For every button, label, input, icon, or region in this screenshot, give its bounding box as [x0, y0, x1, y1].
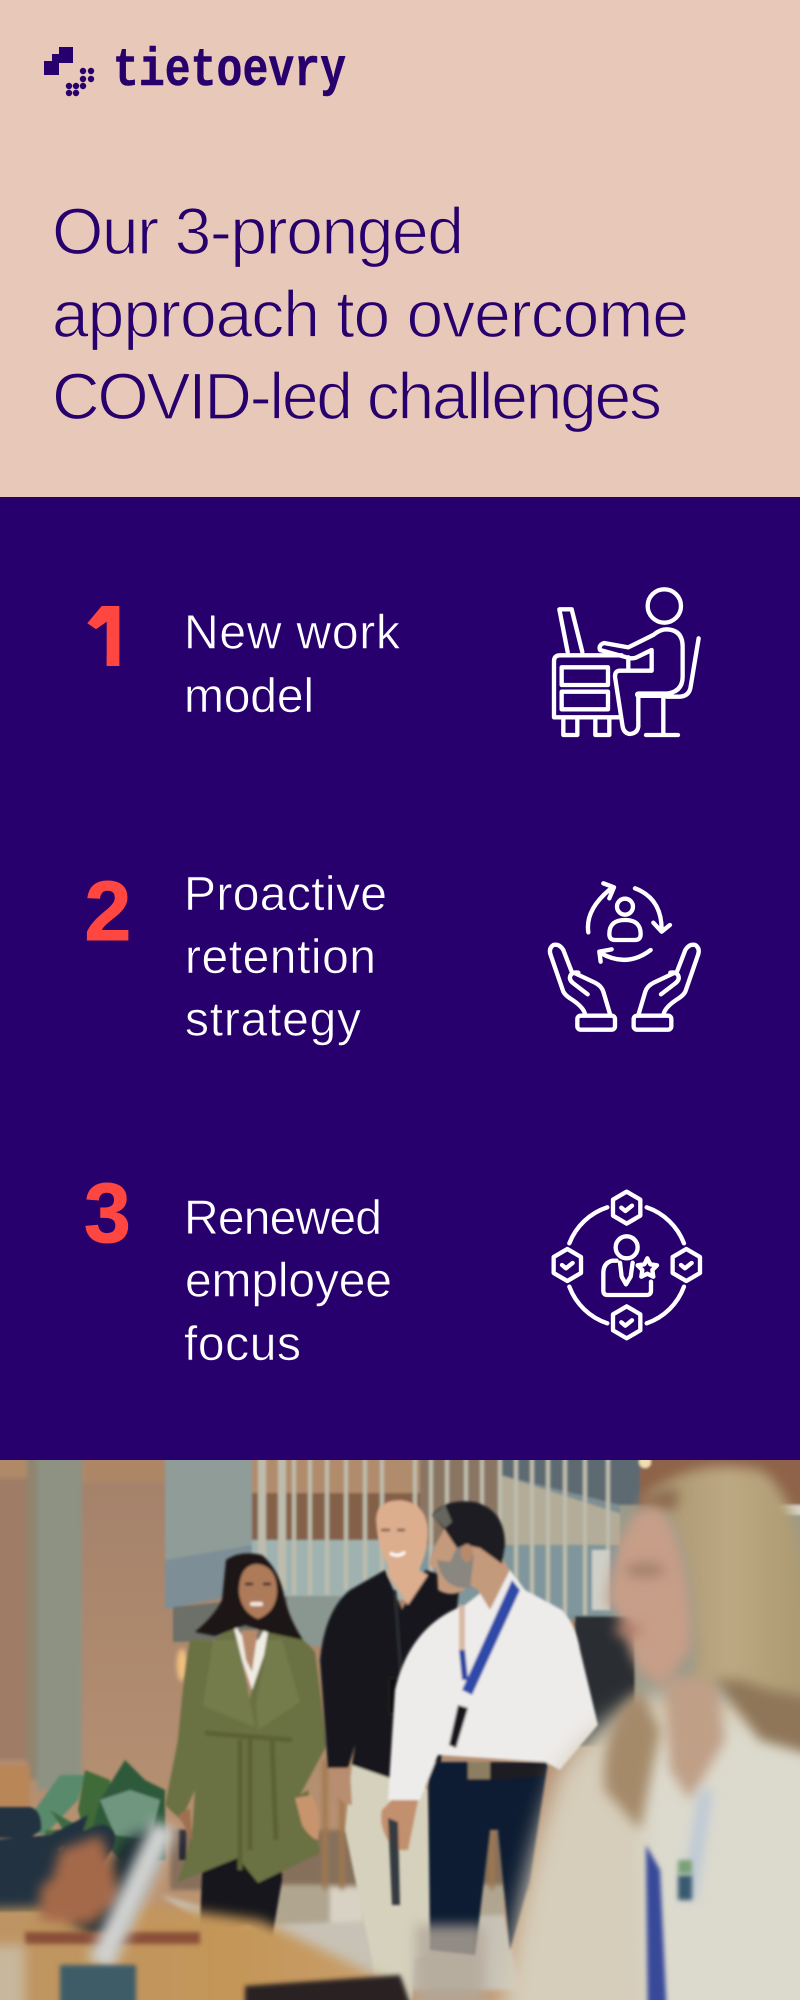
label: renewed employee focus: Renewed [184, 1192, 382, 1245]
person: woman in olive coat [165, 1553, 327, 1938]
foreground: blurred table with objects [0, 1825, 485, 2000]
title: Our 3-pronged [52, 194, 464, 268]
photo background: stairwell panels and slats [165, 1440, 800, 1746]
title: approach to overcome [52, 277, 689, 351]
label: new work model: New work [184, 606, 401, 660]
header panel [0, 0, 800, 497]
label: proactive retention strategy: retention [185, 931, 376, 984]
label: proactive retention strategy: strategy [185, 994, 361, 1046]
label: proactive retention strategy [184, 868, 387, 1046]
label: renewed employee focus: focus [184, 1318, 301, 1371]
item 2: proactive retention strategy [84, 864, 699, 1046]
label: new work model: model [184, 670, 314, 723]
plants [20, 1760, 165, 1860]
icon: hands holding person [550, 883, 699, 1030]
item 1: new work model [87, 589, 699, 735]
photo background: wall, column and ceiling [0, 1460, 738, 2000]
icon: person at desk [554, 589, 699, 735]
number 1: 1 [88, 590, 135, 684]
person: bearded man in white shirt [381, 1501, 598, 1955]
logo: tietoevry [44, 41, 346, 102]
photo: colleagues walking through office [0, 1440, 800, 2000]
label: renewed employee focus: employee [185, 1254, 392, 1308]
label: new work model [184, 606, 401, 723]
photo background: floor and reception [160, 1760, 530, 1990]
label: proactive retention strategy: Proactive [184, 868, 387, 921]
panel: three prongs [85, 587, 702, 1360]
title: COVID-led challenges [52, 359, 662, 433]
title [52, 194, 689, 433]
icon: employee with hexagon ring [554, 1192, 700, 1338]
number 2: 2 [84, 864, 131, 958]
chairs [0, 1807, 115, 1912]
foreground: blurred woman in beige [495, 1466, 800, 2000]
label: renewed employee focus [184, 1192, 392, 1371]
logo: tietoevry: tietoevry [113, 41, 346, 102]
person: man in black shirt [320, 1500, 460, 2000]
number 1 [87, 606, 120, 666]
item 3: renewed employee focus [84, 1166, 700, 1371]
number 3: 3 [84, 1166, 131, 1260]
